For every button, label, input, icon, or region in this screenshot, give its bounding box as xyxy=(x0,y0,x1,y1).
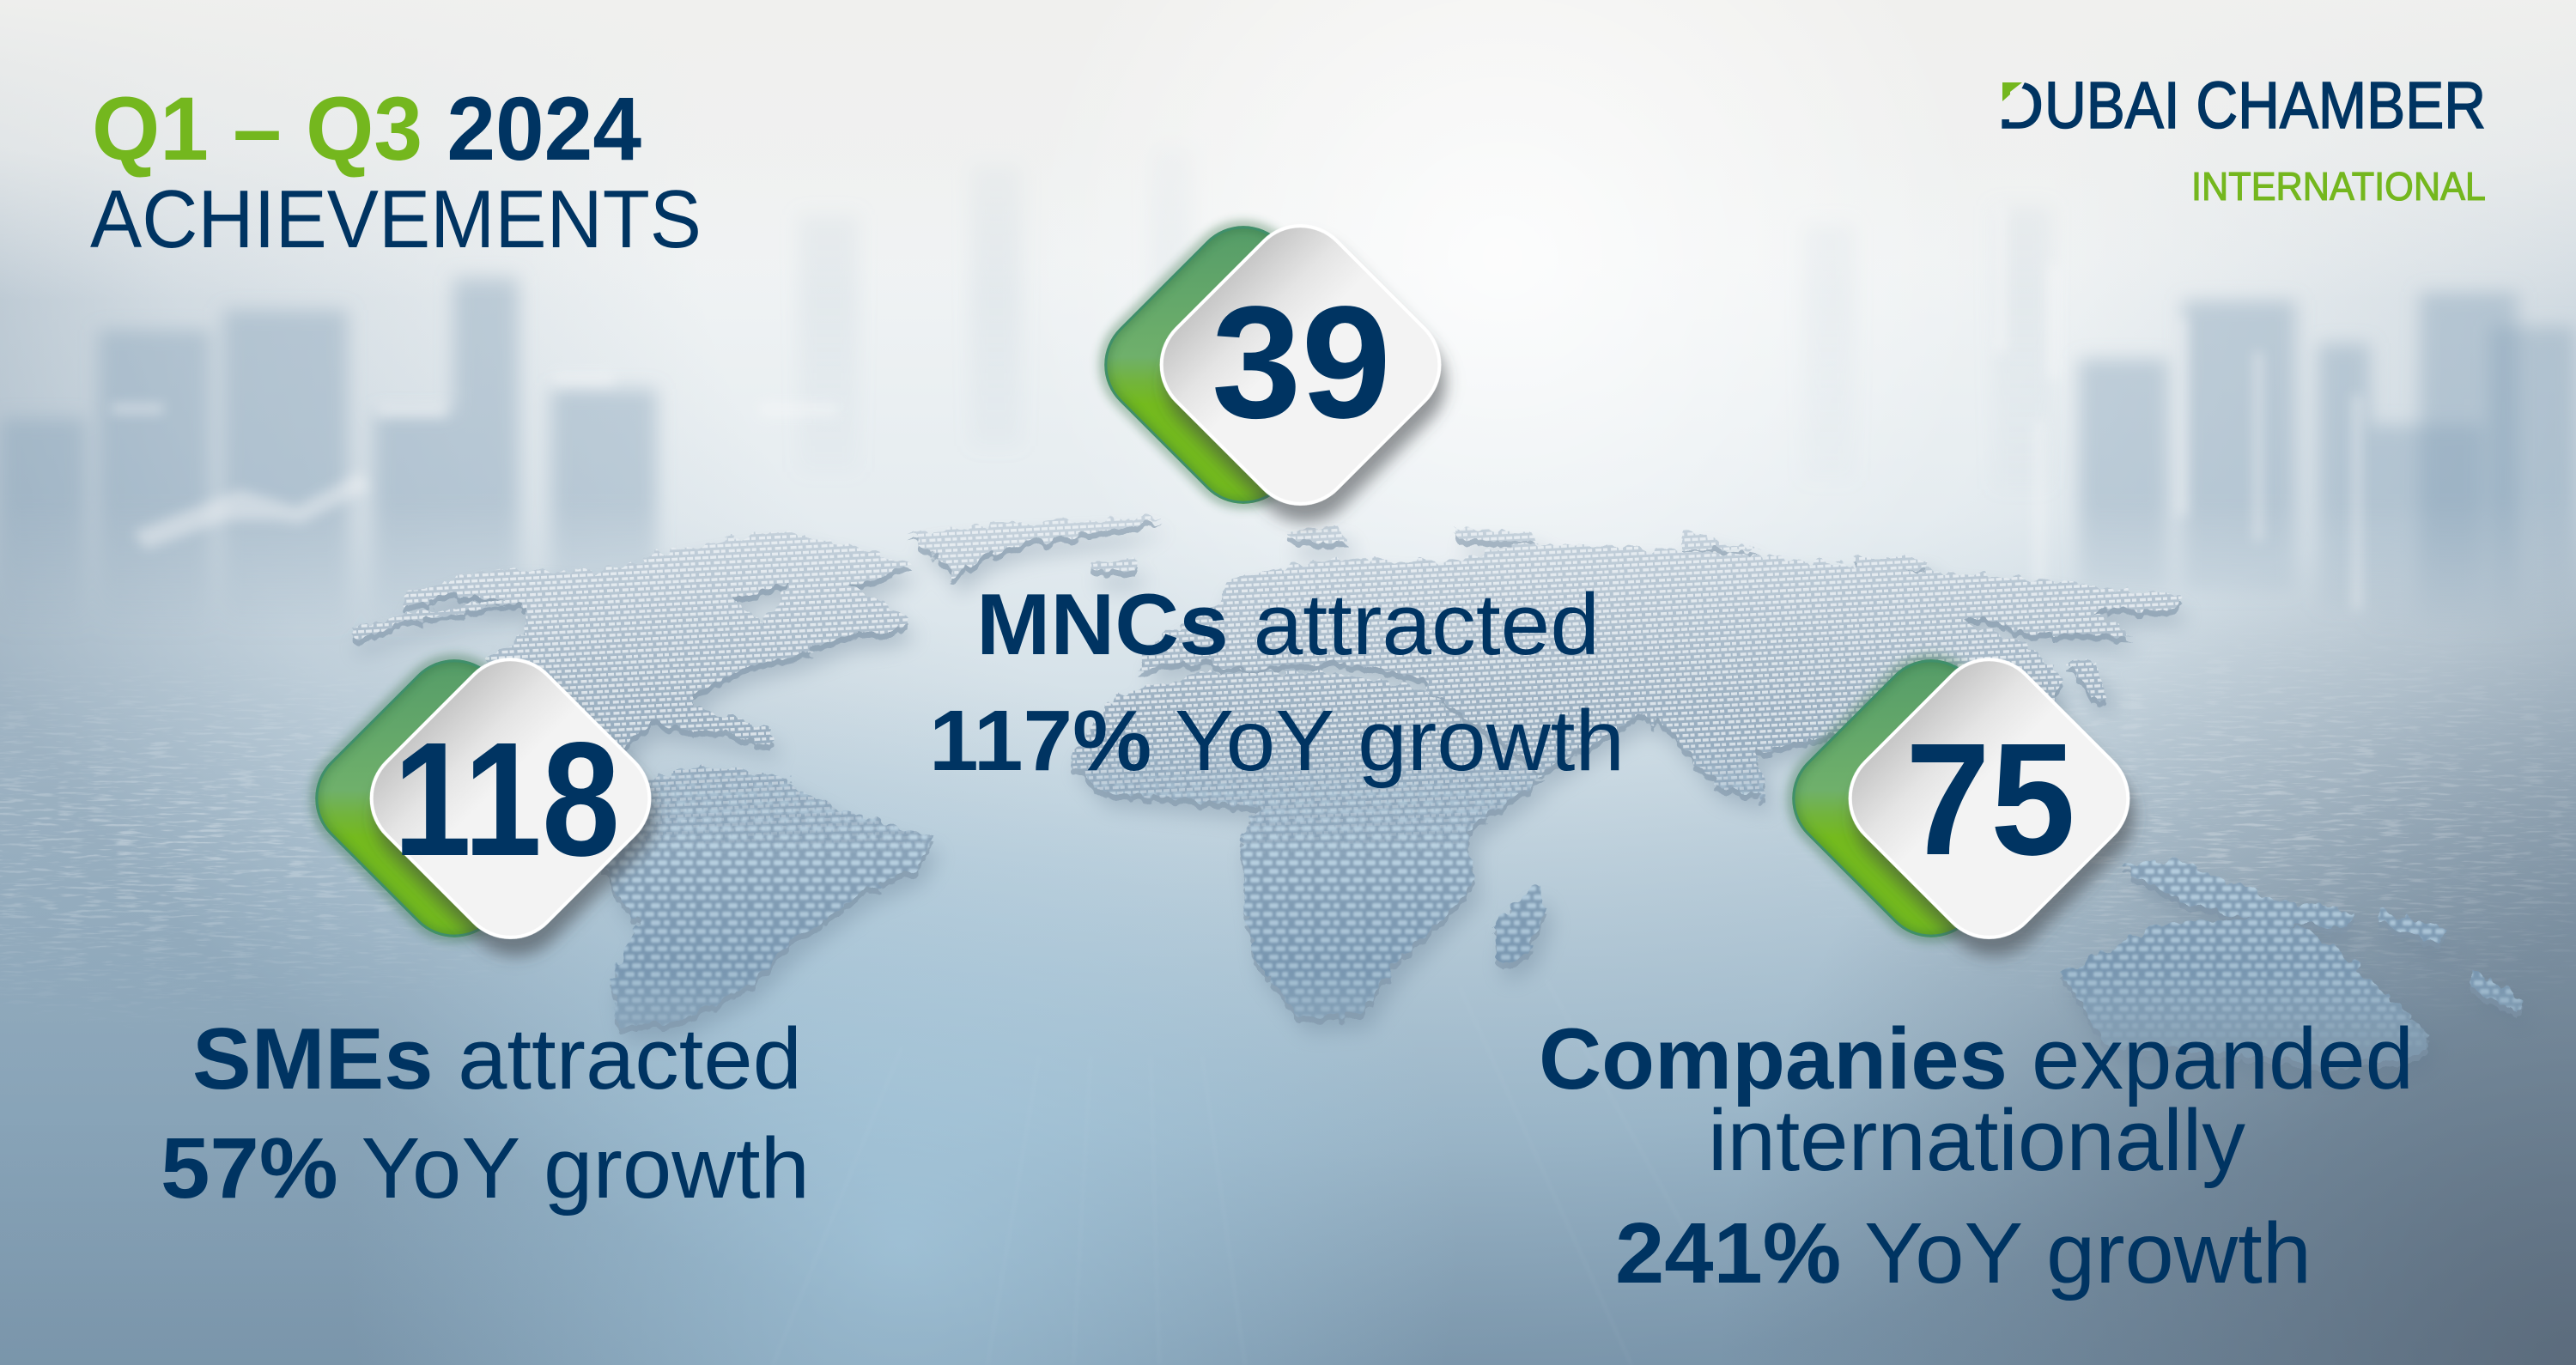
text block: SMEs: 57% YoY growth xyxy=(161,1120,810,1216)
faint distant towers xyxy=(799,146,2052,489)
text block: MNCs: 117% YoY growth xyxy=(929,693,1625,789)
white front diamond xyxy=(1829,638,2149,959)
badge: 75 companies xyxy=(1771,638,2149,959)
icon: green logo corner xyxy=(2002,82,2022,101)
number 118: 118 xyxy=(393,709,620,890)
green back diamond xyxy=(1083,204,1404,525)
title line: achievements: ACHIEVEMENTS xyxy=(90,173,702,265)
green back diamond xyxy=(1771,638,2092,959)
number 75: 75 xyxy=(1905,711,2075,889)
green back diamond xyxy=(294,638,615,959)
skyline light streaks xyxy=(112,206,2361,635)
logo: Dubai Chamber International xyxy=(2002,81,2485,201)
badge: 39 MNCs xyxy=(1083,204,1461,525)
text block: companies: internationally xyxy=(1708,1093,2245,1189)
text block: companies: 241% YoY growth xyxy=(1615,1205,2312,1301)
logo: Dubai Chamber International: UBAI CHAMBER xyxy=(2044,69,2486,143)
text block: MNCs: MNCs attracted xyxy=(976,577,1600,673)
white front diamond xyxy=(350,638,671,959)
text block: companies xyxy=(1539,1011,2414,1301)
blurred skyline buildings xyxy=(0,276,2576,644)
white front diamond xyxy=(1140,204,1461,525)
badge: 118 SMEs xyxy=(294,638,671,959)
title xyxy=(90,79,702,265)
text block: SMEs xyxy=(161,1011,810,1216)
world map of extruded dots xyxy=(352,513,2523,1070)
logo subtitle: INTERNATIONAL xyxy=(2191,164,2486,209)
number 39: 39 xyxy=(1212,274,1391,452)
text block: MNCs xyxy=(929,577,1625,789)
floor data streaks xyxy=(0,714,409,986)
perspective floor streaks xyxy=(773,979,1717,1365)
title line: period: Q1 – Q3 2024 xyxy=(92,79,641,179)
text block: companies: Companies expanded xyxy=(1539,1011,2414,1107)
text block: SMEs: SMEs attracted xyxy=(192,1011,802,1107)
logo: Dubai Chamber International: D xyxy=(1997,69,2044,143)
